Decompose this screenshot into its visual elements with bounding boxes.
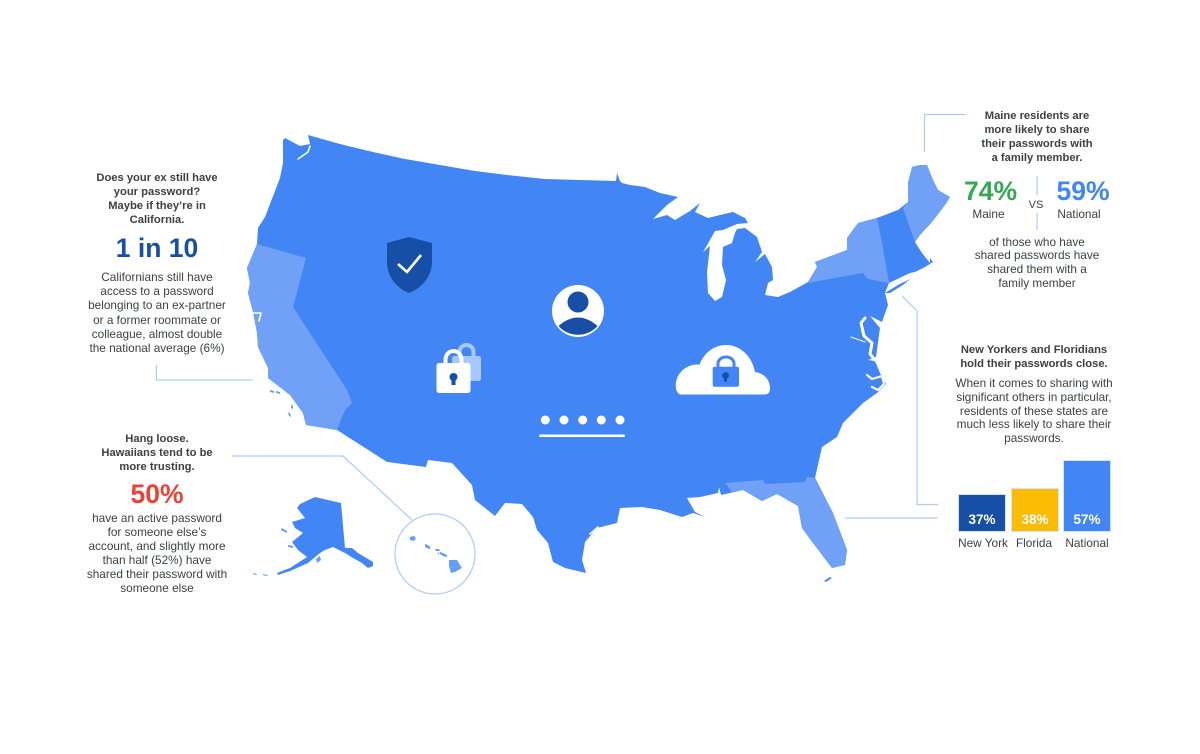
body: California: colleague, almost double — [92, 327, 222, 341]
body: California: the national average (6%) — [89, 341, 225, 355]
body: New York and Florida: residents of these states are — [960, 404, 1108, 418]
heading: Hawaii — [101, 433, 213, 473]
Alaska: Kodiak and Aleutian islands — [253, 528, 321, 576]
stat: Maine 74% — [964, 176, 1017, 221]
text: VS: VS — [1029, 199, 1043, 211]
state: California — [247, 244, 352, 430]
heading: Maine: their passwords with — [981, 138, 1093, 150]
islands: California Channel — [270, 390, 293, 417]
heading: California: Does your ex still have — [96, 172, 218, 184]
stat: 50%: 50% — [130, 479, 184, 509]
heading: California: your password? — [114, 186, 200, 198]
map: Alaska — [277, 497, 373, 575]
heading: Maine — [981, 110, 1093, 164]
icon: user avatar — [552, 285, 604, 337]
state: New York — [808, 218, 889, 283]
state: Maine — [903, 165, 950, 242]
body: New York and Florida: much less likely to share their — [957, 417, 1111, 431]
body: Hawaii: than half (52%) have — [103, 553, 211, 567]
body: Maine: of those who have — [989, 234, 1085, 248]
icon: password field — [539, 416, 625, 437]
bar: New York — [958, 494, 1006, 532]
heading: New York and Florida — [960, 344, 1108, 370]
coastal inlets — [253, 146, 884, 534]
bar: New York: 37% — [968, 512, 996, 527]
body: New York and Florida: When it comes to sharing with — [955, 376, 1113, 390]
bar: Florida — [1011, 488, 1059, 532]
text block: Hawaii — [87, 433, 227, 595]
body: California — [88, 270, 226, 355]
body: Hawaii: have an active password — [92, 511, 222, 525]
map: contiguous United States — [247, 135, 950, 582]
body: Maine: family member — [998, 276, 1076, 290]
heading: California: Maybe if they’re in — [108, 200, 206, 212]
axis labels — [958, 536, 1109, 550]
bar: National: 57% — [1073, 512, 1101, 527]
heading: Hawaii: Hang loose. — [125, 433, 189, 445]
text block: California — [88, 172, 226, 355]
state: Florida — [725, 477, 847, 568]
stat: National 59%: National — [1057, 207, 1101, 221]
body: California: or a former roommate or — [93, 313, 221, 327]
connector lines — [156, 114, 1037, 518]
icon: shield with check — [387, 237, 432, 293]
axis labels: Florida — [1016, 536, 1052, 550]
icon: cloud lock — [676, 345, 770, 394]
body: Hawaii: someone else — [120, 581, 194, 595]
bar: Florida: 38% — [1021, 512, 1049, 527]
stat: National 59%: 59% — [1056, 176, 1110, 206]
body: California: access to a password — [100, 284, 214, 298]
axis labels: National — [1065, 536, 1109, 550]
map: Hawaiian islands — [410, 536, 462, 573]
stat: Maine 74%: 74% — [964, 176, 1017, 206]
body: Hawaii — [87, 511, 227, 595]
stat: National 59% — [1056, 176, 1110, 221]
heading: California — [96, 172, 218, 226]
body: Maine — [975, 234, 1099, 290]
body: Maine: shared passwords have — [975, 248, 1099, 262]
body: California: belonging to an ex-partner — [88, 298, 226, 312]
stat: 1 in 10: 1 in 10 — [116, 233, 198, 263]
heading: Maine: a family member. — [992, 152, 1082, 164]
body: Hawaii: for someone else’s — [108, 525, 206, 539]
body: New York and Florida — [955, 376, 1113, 445]
body: Maine: shared them with a — [987, 262, 1087, 276]
body: New York and Florida: passwords. — [1004, 431, 1064, 445]
body: New York and Florida: significant others in particular, — [956, 390, 1112, 404]
stat: Maine 74%: Maine — [972, 207, 1005, 221]
heading: New York and Florida: New Yorkers and Floridians — [961, 344, 1107, 356]
body: Hawaii: shared their password with — [87, 567, 227, 581]
heading: Hawaii: Hawaiians tend to be — [101, 447, 213, 459]
bar chart: significant others — [958, 460, 1111, 550]
island: Long Island — [885, 279, 910, 293]
axis labels: New York — [958, 536, 1008, 550]
Hawaii circle — [395, 514, 475, 594]
heading: Hawaii: more trusting. — [119, 461, 195, 473]
connector: Hawaii — [232, 456, 475, 594]
islands: Florida Keys — [824, 577, 832, 582]
bar: National — [1063, 460, 1111, 532]
icon: padlocks — [436, 345, 481, 393]
body: Hawaii: account, and slightly more — [88, 539, 226, 553]
heading: Maine: Maine residents are — [985, 110, 1089, 122]
body: California: Californians still have — [101, 270, 213, 284]
heading: New York and Florida: hold their passwords close. — [960, 358, 1108, 370]
heading: California: California. — [130, 214, 184, 226]
heading: Maine: more likely to share — [984, 124, 1090, 136]
